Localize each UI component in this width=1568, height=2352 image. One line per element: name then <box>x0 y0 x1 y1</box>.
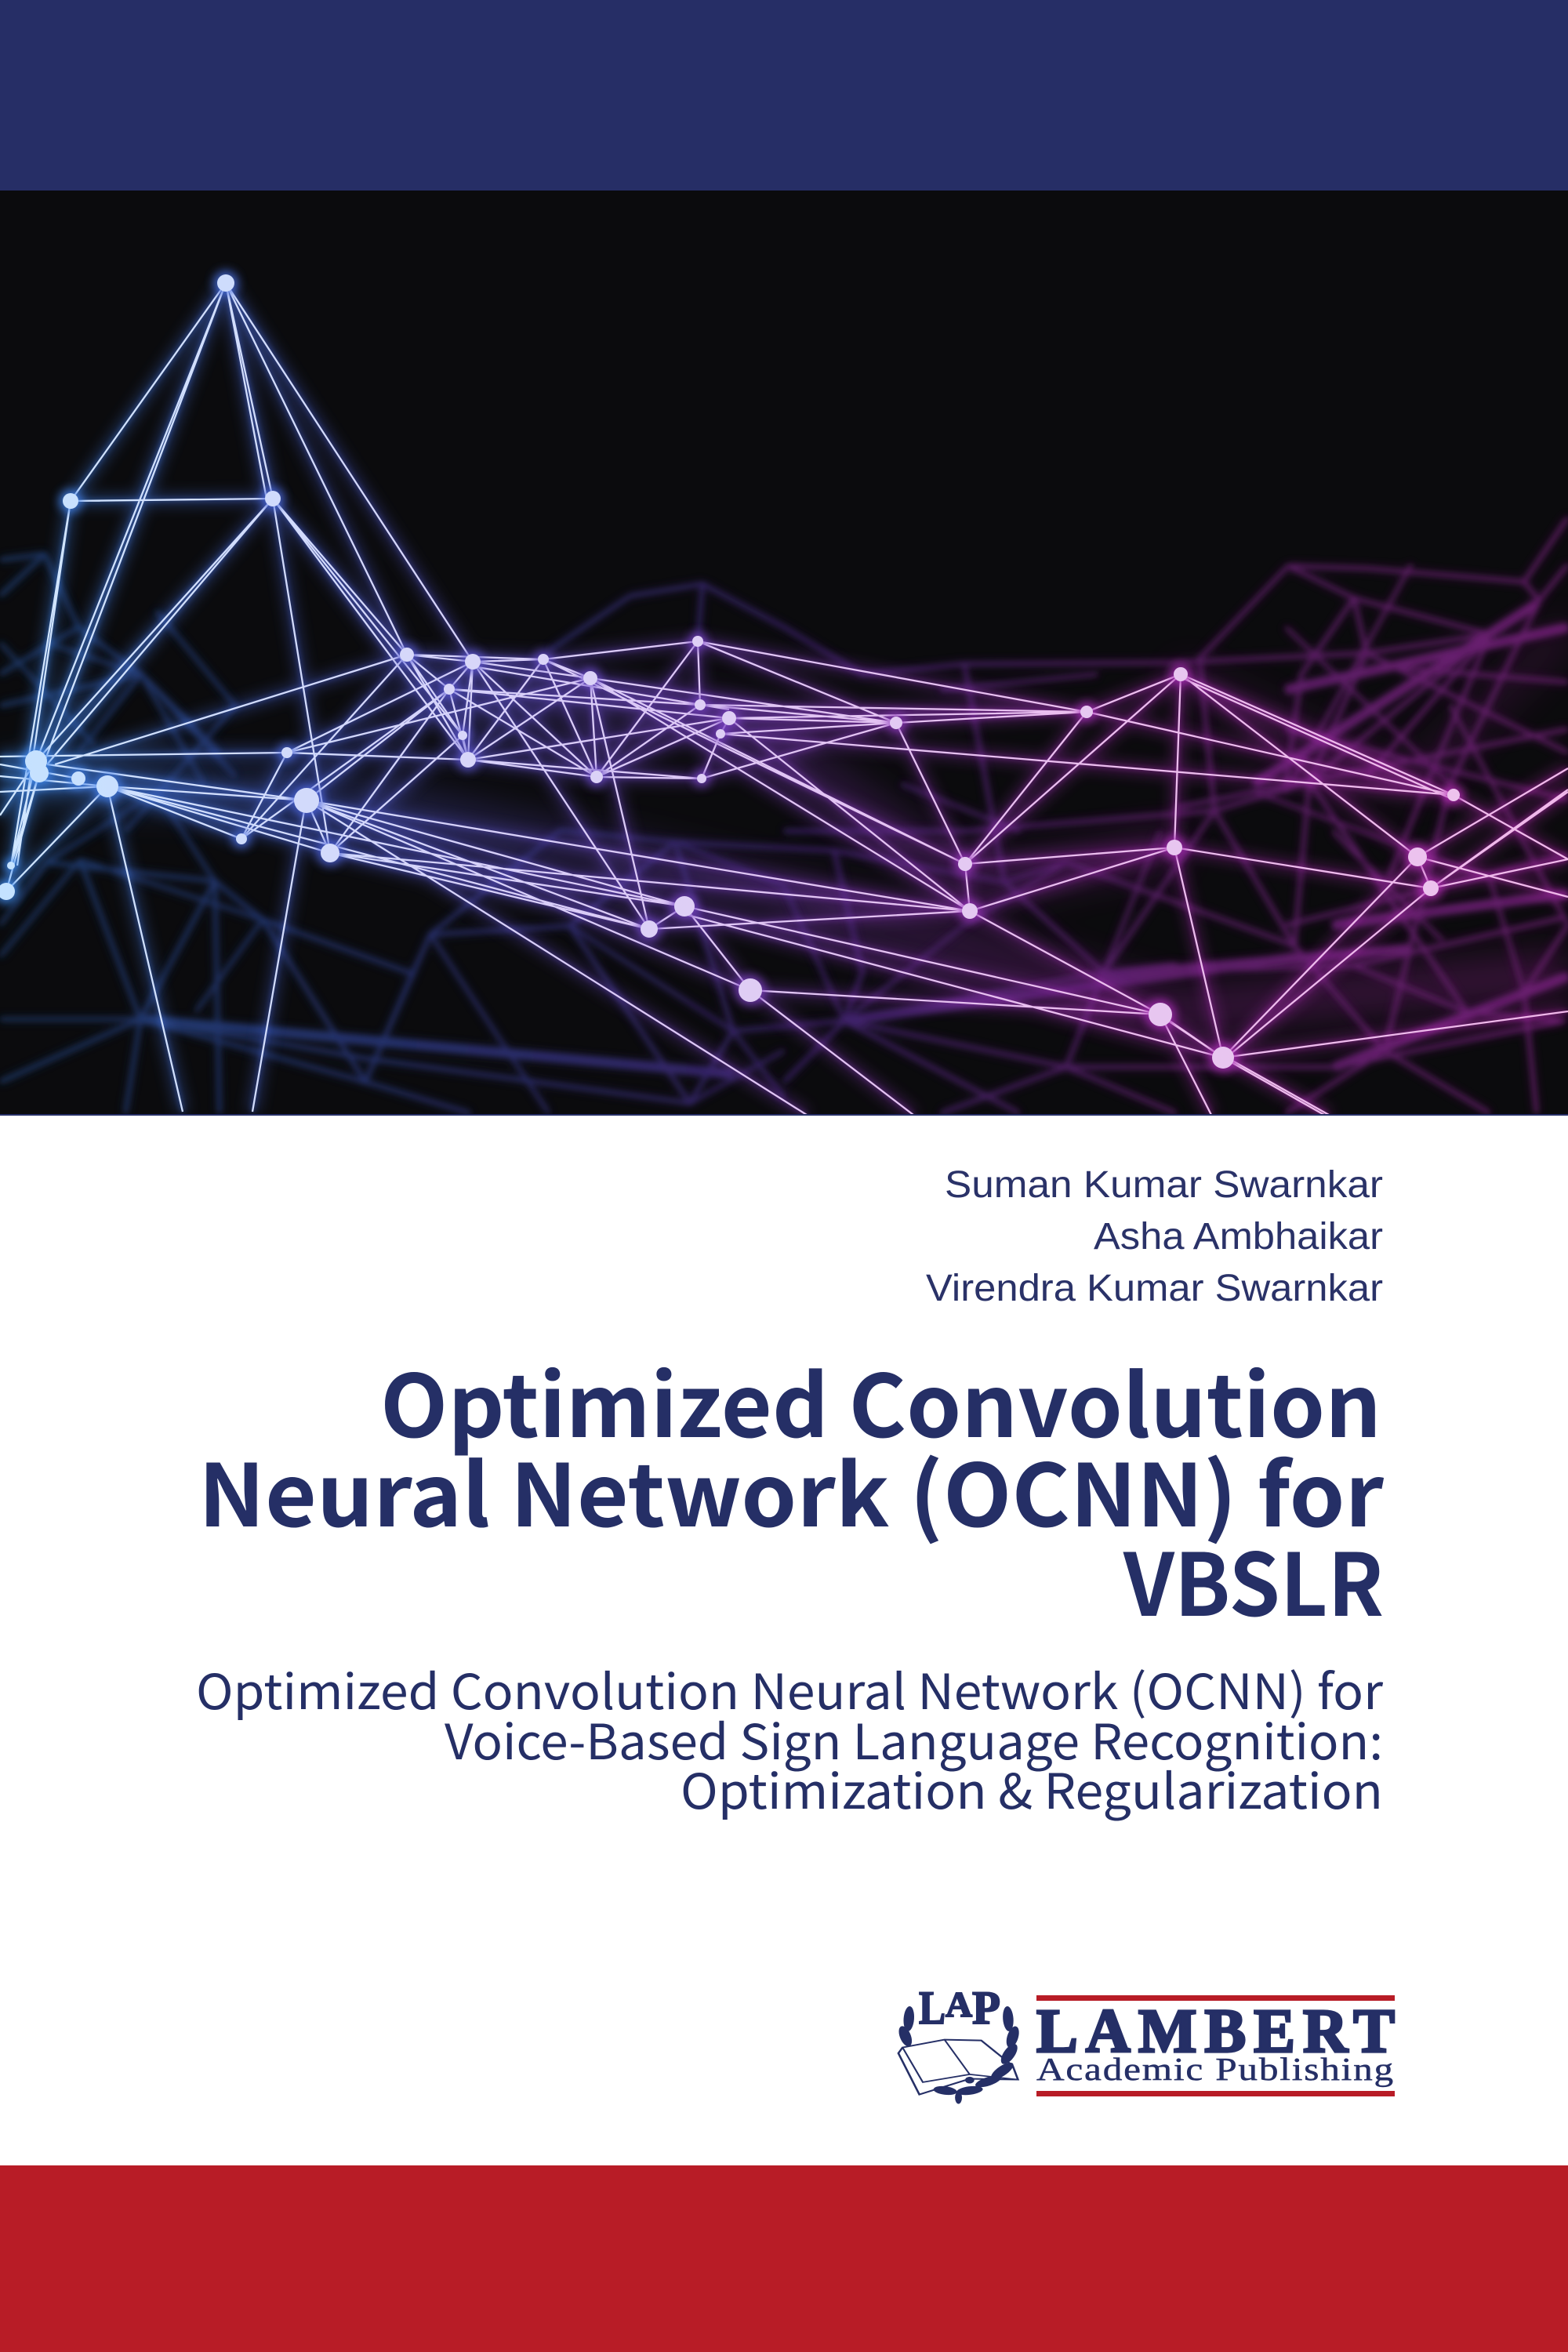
authors <box>926 1164 1383 1309</box>
red rule bottom <box>1036 2091 1395 2096</box>
subtitle: Optimization & Regularization <box>681 1752 1383 1823</box>
icon: LAP letters: A <box>946 1984 972 2024</box>
icon: LAP letters: L <box>919 1982 946 2034</box>
top navy band <box>0 0 1568 191</box>
publisher logo <box>896 1982 1395 2104</box>
cover image: glowing neural network on black <box>0 191 1568 1115</box>
icon: book and laurel emblem <box>896 2006 1022 2104</box>
faint background network: wide haze <box>0 517 1568 1113</box>
network edges: bright lines <box>0 283 1568 1115</box>
icon: LAP letters: P <box>972 1982 1000 2034</box>
title <box>198 1337 1385 1641</box>
network nodes: bright dots <box>0 274 1460 1069</box>
network edges: wide glow <box>0 283 1568 1115</box>
red rule top <box>1036 1995 1395 2001</box>
faint background network: lines <box>0 517 1568 1113</box>
title: Optimized Convolution <box>380 1337 1381 1462</box>
authors: Virendra Kumar Swarnkar <box>926 1268 1383 1309</box>
subtitle: Optimized Convolution Neural Network (OCNN) for <box>196 1653 1384 1723</box>
LAMBERT wordmark: LAMBERT <box>1036 1998 1395 2066</box>
authors: Asha Ambhaikar <box>1094 1216 1383 1258</box>
subtitle <box>196 1653 1384 1823</box>
network edges: tight glow <box>0 283 1568 1115</box>
authors: Suman Kumar Swarnkar <box>945 1164 1383 1206</box>
subtitle: Voice-Based Sign Language Recognition: <box>445 1703 1383 1773</box>
icon: LAP letters <box>919 1982 1000 2034</box>
bottom red band <box>0 2165 1568 2352</box>
network nodes: glow <box>0 274 1460 1069</box>
title: Neural Network (OCNN) for <box>198 1426 1385 1552</box>
Academic Publishing wordmark: Academic Publishing <box>1036 2051 1395 2087</box>
title: VBSLR <box>1123 1515 1384 1641</box>
